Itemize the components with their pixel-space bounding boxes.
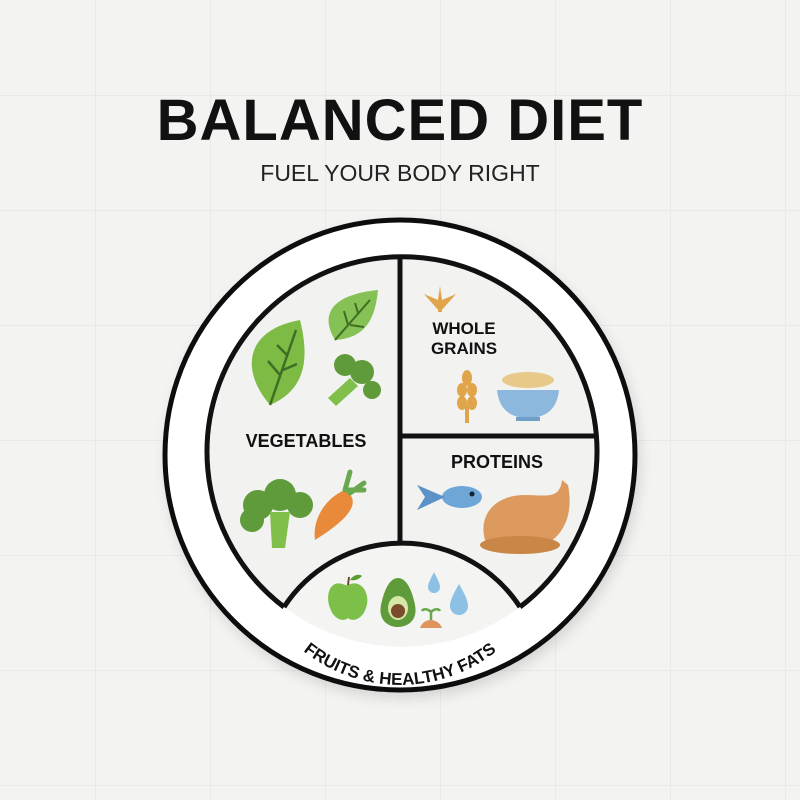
- icon: broccoli small: [328, 354, 381, 406]
- icon: leaf large: [252, 320, 305, 405]
- panel: whole grains: GRAINS: [431, 339, 497, 358]
- icon: carrot: [315, 472, 364, 540]
- panel: vegetables: [240, 290, 381, 548]
- icon: roast chicken: [480, 480, 570, 554]
- icon: wheat stalk: [457, 370, 477, 423]
- icon: water drops and sprout: [420, 572, 468, 628]
- panel: fruits & healthy fats: [304, 572, 495, 685]
- label: whole grains: WHOLE: [432, 319, 496, 338]
- icon: bowl: [497, 372, 559, 421]
- icon: apple: [328, 575, 367, 620]
- icon: wheat top: [424, 286, 456, 312]
- subtitle: FUEL YOUR BODY RIGHT: [260, 160, 540, 186]
- panel: whole grains: [424, 286, 559, 423]
- icon: fish: [417, 485, 482, 510]
- title: BALANCED DIET: [157, 88, 643, 153]
- label: vegetables: VEGETABLES: [246, 431, 366, 451]
- icon: avocado: [380, 578, 416, 627]
- panel: proteins: [417, 452, 570, 554]
- icon: leaf small: [329, 290, 378, 340]
- label: fruits & healthy fats: FRUITS & HEALTHY FATS: [304, 642, 495, 685]
- icon: broccoli: [240, 479, 313, 548]
- label: proteins: PROTEINS: [451, 452, 543, 472]
- plate: [165, 220, 635, 690]
